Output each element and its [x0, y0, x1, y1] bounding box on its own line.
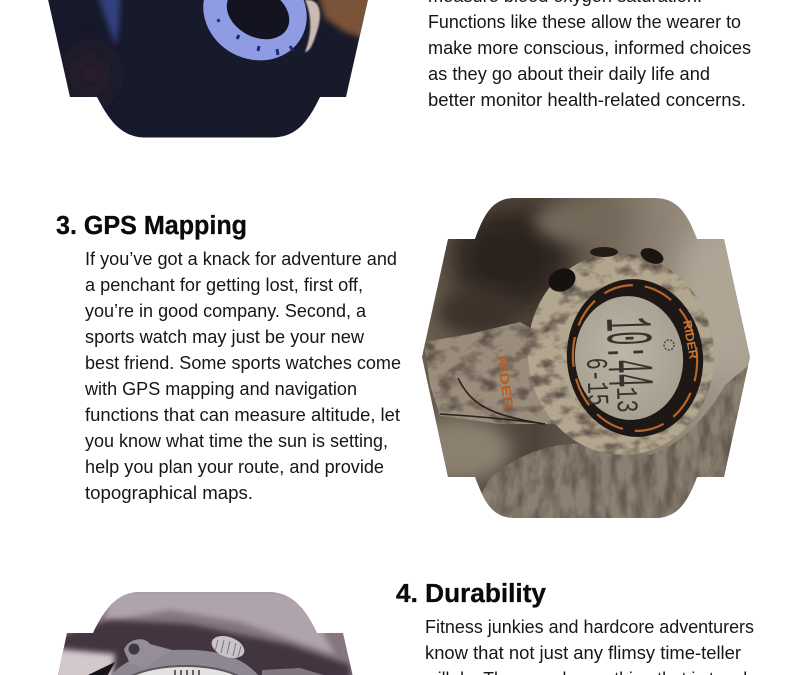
seconds reading: 13: [607, 386, 642, 413]
body text: GPS Mapping: a penchant for getting lost, first off,: [85, 275, 363, 295]
light upper band: [105, 590, 335, 655]
body text: GPS Mapping: best friend. Some sports watches come: [85, 353, 401, 373]
body text: GPS Mapping: with GPS mapping and navigation: [84, 379, 357, 399]
watch bezel: [203, 0, 307, 60]
body text: Durability: [424, 617, 754, 675]
watch body: [528, 247, 714, 455]
dark strap edge: [88, 662, 115, 675]
watch face: [574, 296, 684, 420]
camouflage strap: [424, 320, 558, 426]
blue sleeve highlight: [98, 0, 120, 47]
body text: GPS Mapping: help you plan your route, and provide: [85, 457, 384, 477]
case: [108, 650, 262, 675]
photo: steel watch: [50, 590, 360, 675]
body text: Durability: Fitness junkies and hardcore adventurers: [425, 617, 754, 637]
body text: health functions: make more conscious, informed choices: [428, 38, 751, 58]
maroon shadow: [68, 47, 112, 103]
pale left band: [50, 648, 115, 675]
dial: [132, 665, 238, 675]
knurled crown: [212, 636, 244, 658]
RIDER bezel label: RIDER: [680, 319, 701, 360]
body text: health functions: [428, 0, 751, 110]
weather icon: [664, 340, 674, 350]
photo: watch on dark sleeve: [40, 0, 375, 145]
body text: health functions: better monitor health-related concerns.: [428, 90, 746, 110]
dark band: [50, 620, 350, 675]
push buttons: [548, 268, 576, 292]
watch lug: [305, 0, 320, 52]
wooden log: [482, 366, 748, 518]
heading: Durability: 4. Durability: [396, 580, 547, 608]
body text: GPS Mapping: functions that can measure altitude, let: [85, 405, 400, 425]
body text: GPS Mapping: you’re in good company. Second, a: [85, 301, 367, 321]
bezel ring: [566, 279, 704, 437]
body text: health functions: Functions like these allow the wearer to: [428, 12, 741, 32]
body text: Durability: know that not just any flimsy time-teller: [425, 643, 741, 663]
watch body: 10:44: [587, 316, 664, 389]
body text: GPS Mapping: topographical maps.: [85, 483, 253, 503]
body text: health functions: as they go about their daily life and: [428, 64, 710, 84]
RIDER strap label: RIDER: [494, 354, 517, 411]
body text: GPS Mapping: sports watch may just be your new: [85, 327, 365, 347]
lug screw: [124, 639, 172, 662]
body text: GPS Mapping: [84, 249, 401, 503]
date reading: 6-15: [577, 357, 613, 406]
heading: GPS Mapping: 3. GPS Mapping: [56, 212, 247, 240]
blurred background: [410, 202, 765, 480]
photo: camouflage Rider watch on a log: [422, 198, 750, 518]
body text: GPS Mapping: If you’ve got a knack for adventure and: [85, 249, 397, 269]
body text: GPS Mapping: you know what time the sun is setting,: [85, 431, 388, 451]
brown skin corner: [316, 0, 368, 40]
